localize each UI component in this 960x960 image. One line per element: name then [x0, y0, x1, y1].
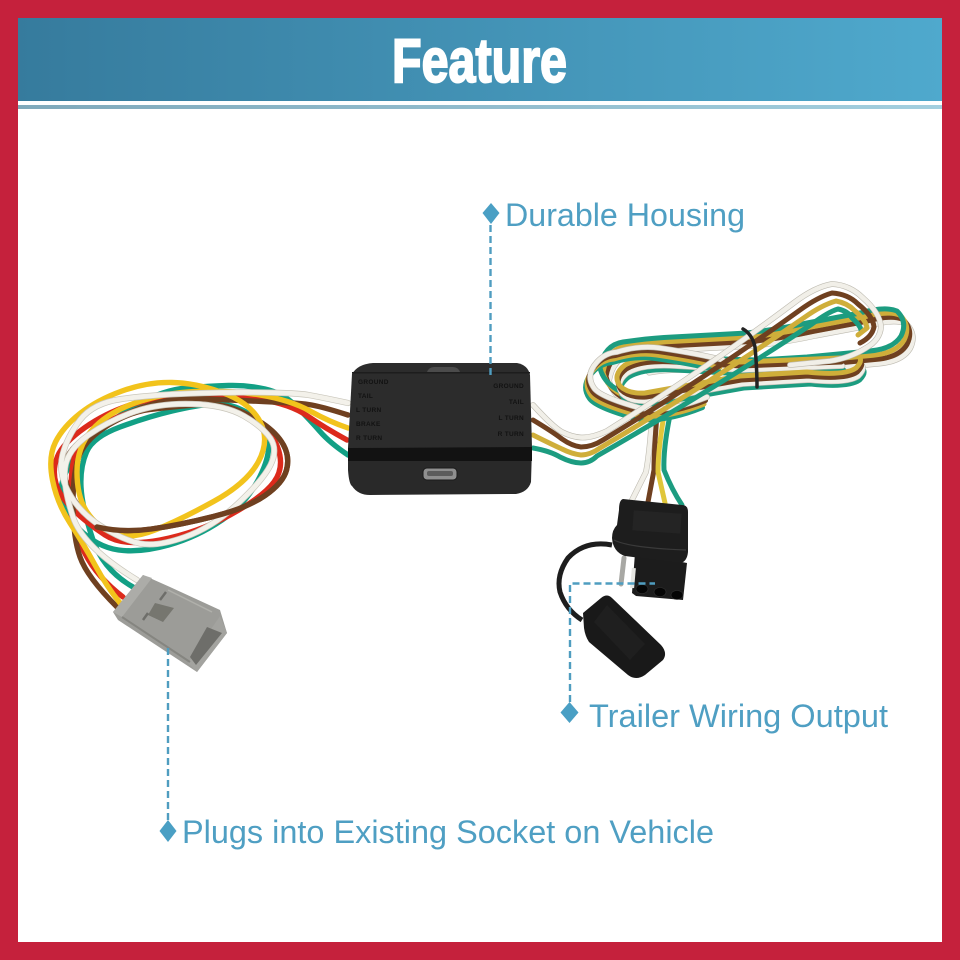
callout: durable housing: [482, 197, 745, 378]
plug metal pin: [621, 558, 624, 584]
label: Plugs into Existing Socket on Vehicle: [182, 814, 714, 850]
plug dust cap: [583, 596, 665, 678]
box left terminal labels: R TURN: [356, 435, 382, 442]
label: Trailer Wiring Output: [589, 698, 888, 734]
box left terminal labels: TAIL: [358, 393, 373, 400]
box right terminal labels: TAIL: [509, 399, 524, 406]
icon: diamond: [160, 820, 176, 842]
wiring harness product: [51, 284, 913, 678]
cable tie: [743, 329, 757, 387]
header banner: [18, 18, 942, 109]
left outer coil band: [586, 347, 723, 420]
pigtail wires to plug: [632, 415, 682, 505]
trailer side ribbon wires: [533, 284, 913, 505]
box left terminal labels: BRAKE: [356, 421, 381, 428]
icon: diamond: [482, 203, 500, 224]
box left terminal labels: GROUND: [358, 379, 389, 386]
upper coil band: [600, 309, 913, 411]
black junction box: [348, 363, 532, 495]
leader line: [489, 225, 492, 378]
box right terminal labels: GROUND: [493, 383, 524, 390]
box left terminal labels: [356, 379, 389, 442]
plug tongue and holes: [630, 553, 687, 600]
plug body: [612, 499, 688, 563]
callout: plugs into existing socket: [160, 645, 714, 850]
middle coil band: [617, 358, 864, 405]
label: Durable Housing: [505, 197, 745, 233]
front diagonal band from box: [533, 284, 881, 463]
box right terminal labels: L TURN: [498, 415, 524, 422]
cap strap: [559, 544, 612, 620]
leader line: [167, 645, 169, 820]
box left terminal labels: L TURN: [356, 407, 382, 414]
connector: vehicle plug: [113, 575, 227, 672]
title: Feature: [392, 27, 567, 96]
box right terminal labels: R TURN: [498, 431, 524, 438]
callout: trailer wiring output: [560, 584, 888, 734]
vehicle side wire loop: [51, 382, 348, 607]
trailer flat four plug and cap: [559, 499, 688, 678]
leader line: [570, 584, 655, 702]
icon: diamond: [560, 702, 578, 723]
box right terminal labels: [493, 383, 524, 438]
